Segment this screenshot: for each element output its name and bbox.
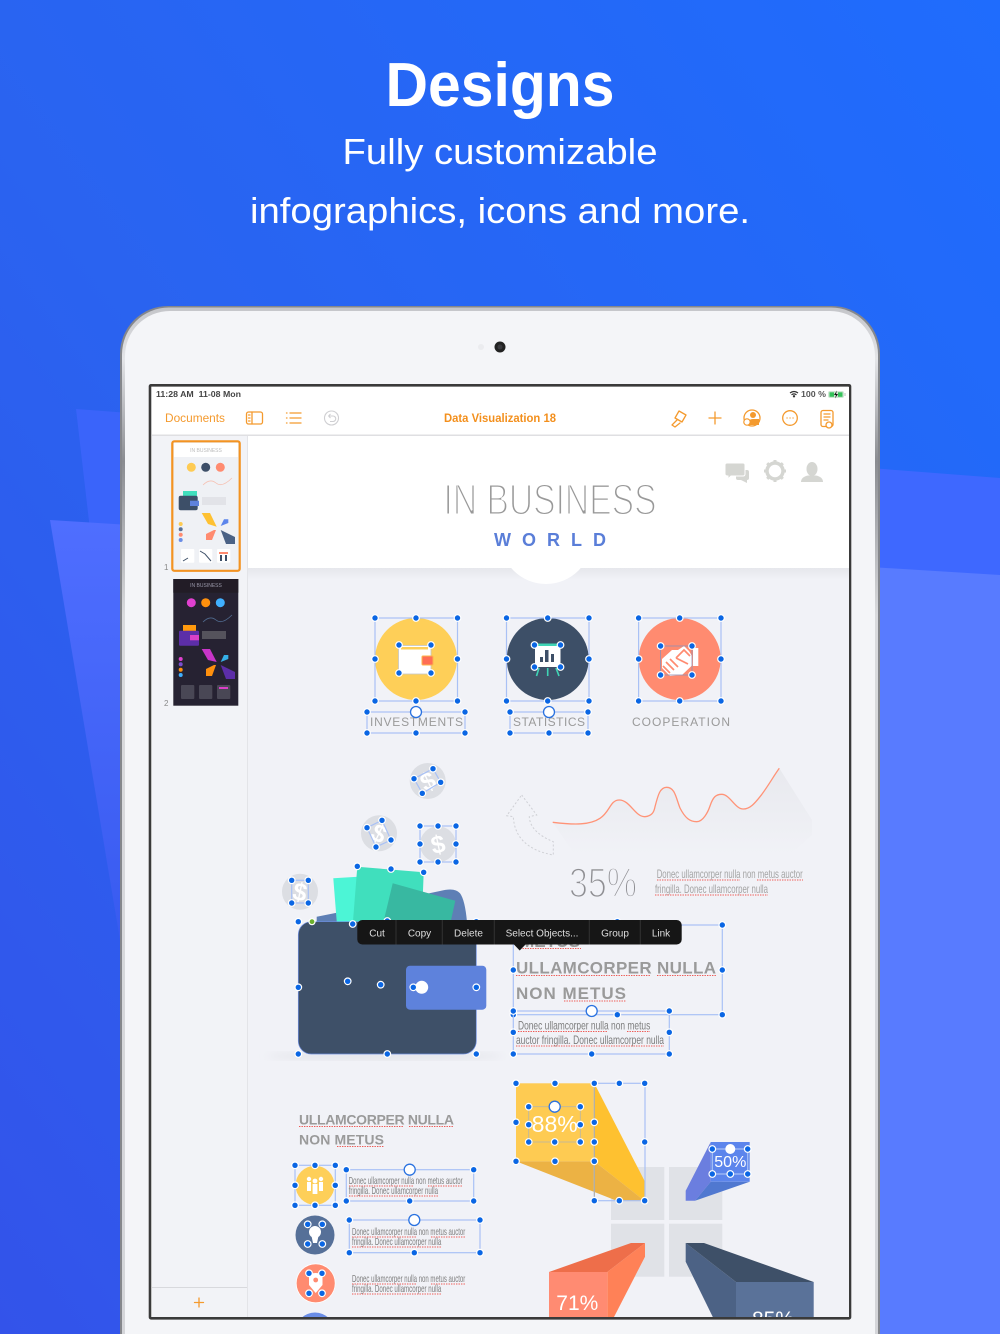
coin 3 xyxy=(417,823,459,865)
thumbnail 2 xyxy=(173,579,238,706)
subtitle xyxy=(250,131,750,231)
thumbnail 1 xyxy=(172,441,240,571)
stat: 35 percent: 35% xyxy=(569,859,637,906)
3d block: 88 percent xyxy=(513,1080,648,1204)
context menu: Cut xyxy=(369,928,385,940)
context menu: Link xyxy=(652,928,671,940)
coin 1 xyxy=(410,763,446,799)
collaborate icon xyxy=(744,410,760,426)
label: investments xyxy=(364,706,468,736)
toolbar xyxy=(152,408,849,436)
sidebar toggle icon xyxy=(246,412,262,424)
battery icon xyxy=(828,390,846,398)
label: investments: INVESTMENTS xyxy=(370,715,463,729)
label: statistics xyxy=(507,706,591,736)
coin 2 xyxy=(361,815,397,851)
list text 1 xyxy=(343,1164,477,1204)
wallet handles xyxy=(295,918,480,1057)
document preview icon xyxy=(821,410,833,428)
device bezel xyxy=(125,311,875,1334)
3d block: 50 percent: 50% xyxy=(714,1154,746,1171)
heading block: left: NON METUS xyxy=(299,1131,384,1147)
icon: statistics xyxy=(503,615,592,704)
wallet body xyxy=(298,922,476,1054)
tablet device xyxy=(120,306,880,1334)
sidebar: 2 xyxy=(164,699,169,708)
subtitle: Fully customizable xyxy=(342,131,658,172)
chart caption: Donec ullamcorper nulla non metus auctor xyxy=(657,867,803,881)
icon: person xyxy=(801,462,823,482)
3d block: 71 percent xyxy=(549,1243,645,1318)
coin 2: $ xyxy=(366,818,391,850)
list xyxy=(292,1162,483,1334)
add icon xyxy=(709,412,721,424)
grey centre squares xyxy=(611,1167,722,1277)
wallet clasp xyxy=(406,966,486,1010)
list item 3 xyxy=(296,1264,466,1303)
list icon xyxy=(286,413,301,423)
heading block: left: ULLAMCORPER NULLA xyxy=(299,1111,454,1127)
icon: chat xyxy=(725,463,749,483)
chart caption: fringilla. Donec ullamcorper nulla xyxy=(655,882,768,896)
body text block: right: auctor fringilla. Donec ullamcorper nulla xyxy=(516,1033,664,1047)
3d block: 71 percent: 71% xyxy=(556,1292,598,1315)
heading: world: WORLD xyxy=(494,530,606,550)
3d block: 88 percent: 88% xyxy=(532,1111,578,1137)
device outer edge xyxy=(120,306,880,1334)
context menu: Copy xyxy=(408,928,431,940)
device metal band xyxy=(122,308,878,1334)
brush icon xyxy=(672,411,686,427)
coin 1: $ xyxy=(416,766,440,798)
body text block: right: Donec ullamcorper nulla non metus xyxy=(518,1018,650,1032)
sidebar xyxy=(152,436,248,1320)
title: Designs xyxy=(386,51,614,120)
label: cooperation: COOPERATION xyxy=(632,715,730,729)
more icon xyxy=(783,411,797,425)
toolbar: Data Visualization 18 xyxy=(444,413,557,425)
icon: cooperation xyxy=(635,615,724,704)
bills xyxy=(333,863,455,925)
wallet back flap xyxy=(317,889,467,922)
coin 4: $ xyxy=(290,877,310,908)
status bar xyxy=(152,387,849,408)
list text 2: fringilla. Donec ullamcorper nulla xyxy=(352,1236,441,1248)
list text 1: Donec ullamcorper nulla non metus auctor xyxy=(349,1175,463,1187)
status bar: 100 % xyxy=(801,389,826,399)
sidebar add button xyxy=(194,1298,204,1307)
context menu: Delete xyxy=(454,928,483,940)
context menu: Group xyxy=(601,928,629,940)
line chart xyxy=(553,768,812,855)
heading: in business: IN BUSINESS xyxy=(444,476,656,524)
list text 3 xyxy=(352,1273,466,1295)
coin 3: $ xyxy=(428,830,448,860)
list text 2: Donec ullamcorper nulla non metus auctor xyxy=(352,1226,466,1238)
dashed arrow xyxy=(507,795,553,855)
list text 3: Donec ullamcorper nulla non metus auctor xyxy=(352,1273,466,1285)
context menu xyxy=(357,920,682,950)
list item 2 xyxy=(296,1214,483,1256)
wallet illustration xyxy=(294,862,486,1059)
3d block: 50 percent xyxy=(686,1142,751,1201)
context menu: Select Objects... xyxy=(506,928,578,940)
sidebar: 1 xyxy=(164,563,169,572)
icon: investments xyxy=(372,615,461,704)
3d block: 85 percent xyxy=(686,1243,814,1331)
canvas background xyxy=(248,580,849,1317)
heading block: left xyxy=(299,1111,454,1147)
status bar: 11:28 AM 11-08 Mon xyxy=(156,389,241,399)
list text 2 xyxy=(346,1214,483,1256)
coins xyxy=(282,763,459,910)
heading block: right: ULLAMCORPER NULLA xyxy=(516,958,716,977)
screen frame xyxy=(150,385,850,1318)
list text 3: fringilla. Donec ullamcorper nulla xyxy=(352,1283,441,1295)
text hidden behind menu: METUS xyxy=(520,932,580,951)
3d block: 85 percent: 85% xyxy=(752,1308,794,1331)
undo icon xyxy=(324,411,338,425)
icon row xyxy=(364,615,730,736)
camera xyxy=(478,342,506,352)
header band xyxy=(248,436,849,584)
list text 1: fringilla. Donec ullamcorper nulla xyxy=(349,1185,438,1197)
coin 4 xyxy=(282,874,318,910)
body text block: right xyxy=(510,1006,673,1057)
screen content xyxy=(152,387,849,1334)
heading block: right: NON METUS xyxy=(516,984,626,1003)
toolbar: Documents xyxy=(165,413,225,425)
list item 1 xyxy=(292,1162,477,1209)
thumbnail 2: IN BUSINESS xyxy=(190,583,222,589)
label: statistics: STATISTICS xyxy=(513,715,585,729)
wifi icon xyxy=(790,392,798,397)
list item 4 xyxy=(296,1312,334,1334)
subtitle: infographics, icons and more. xyxy=(250,190,750,231)
chart caption xyxy=(655,867,803,896)
icon: gear xyxy=(764,460,786,482)
thumbnail 1: IN BUSINESS xyxy=(190,448,222,454)
heading block: right xyxy=(510,918,726,1018)
